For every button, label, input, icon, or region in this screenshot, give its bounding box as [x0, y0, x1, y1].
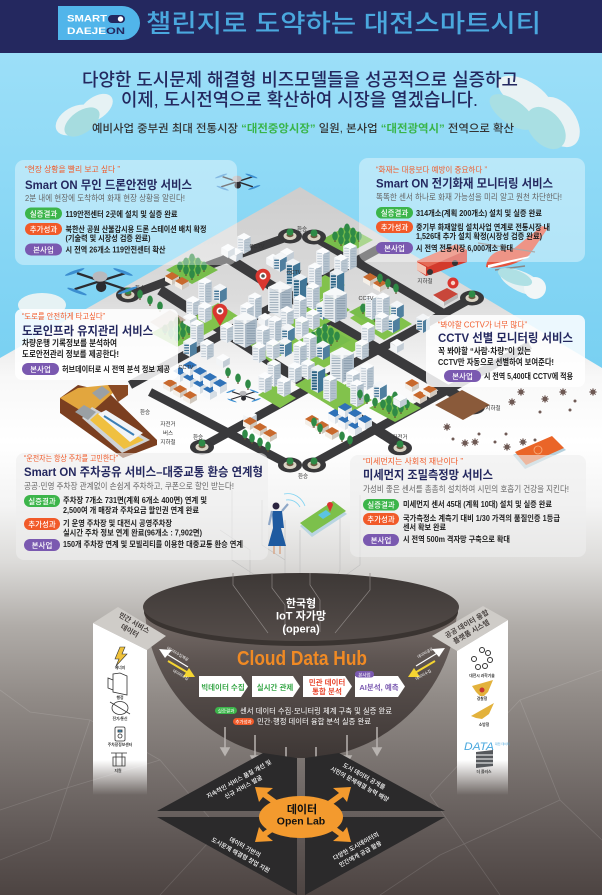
quadrant: bottom-left: 도시문제 해결형 창업 지원 — [210, 836, 271, 875]
icon: parking: 지원 — [114, 768, 122, 773]
city map illustration — [116, 224, 530, 480]
badge: main project: 본사업 — [33, 244, 54, 254]
subway cross-section illustration — [60, 385, 157, 458]
map labels: 환승 — [140, 408, 150, 416]
extra text: 센서 확보 완료 — [403, 522, 447, 532]
icon: stripes platform: 더 플러스 — [476, 769, 492, 774]
tower title: 민간 서비스 — [117, 610, 152, 636]
quote: “미세먼지는 사회적 재난이다 ” — [363, 456, 463, 466]
quote: “운전자는 항상 주차를 고민한다” — [24, 453, 118, 463]
badge: result: 실증결과 — [28, 496, 56, 506]
circuit lines above bowl — [220, 490, 360, 600]
badge: extra: 추가성과 — [30, 224, 57, 234]
headline: 이제, 도시전역으로 확산하여 시장을 열겠습니다. — [121, 90, 478, 110]
headline: 다양한 도시문제 해결형 비즈모델들을 성공적으로 실증하고 — [82, 70, 518, 90]
badge: main project — [25, 244, 62, 256]
process chevrons: 빅데이터 수집 — [201, 682, 245, 692]
city roads — [128, 236, 530, 465]
background network lines — [0, 670, 602, 895]
process chevrons: 통합 분석 — [312, 686, 342, 696]
map labels: CCTV — [179, 365, 194, 371]
background: isometric ground fading to dark — [0, 187, 602, 895]
main project text: 허브데이터로 시 전역 분석 정보 제공 — [62, 364, 170, 374]
map labels: 자전거 — [392, 433, 408, 441]
icon: energy — [115, 647, 127, 670]
drone over city — [226, 389, 261, 403]
extra text: 국가측정소 계측기 대비 1/30 가격의 품질인증 1등급 — [403, 513, 561, 523]
main project text: 시 전역 5,400대 CCTV에 적용 — [484, 371, 574, 381]
panel title: Smart ON 전기화재 모니터링 서비스 — [376, 176, 553, 190]
result text: 119안전센터 2곳에 설치 및 실증 완료 — [66, 209, 178, 219]
circuit lines on bowl — [233, 573, 370, 633]
map labels: 환승 — [297, 225, 307, 233]
cloud: left — [50, 88, 118, 142]
icon: data logo: 대전 데이터 — [495, 741, 510, 746]
badge: result — [376, 207, 413, 218]
panel title: 도로인프라 유지관리 서비스 — [22, 324, 153, 338]
helicopter — [478, 226, 548, 270]
description: CCTV만 자동으로 선별하여 보여준다! — [438, 357, 554, 367]
quote: “도로를 안전하게 타고싶다” — [22, 311, 105, 321]
extra text: 실시간 주차 정보 연계 완료(96개소 : 7,902면) — [63, 528, 202, 538]
map labels: 지하철 — [160, 438, 176, 446]
panel title: CCTV 선별 모니터링 서비스 — [438, 331, 573, 345]
icon: fire badge — [471, 703, 494, 727]
logo: Smart Daejeon: SMART — [67, 14, 107, 24]
quadrant: top-left — [157, 753, 297, 811]
badge: extra — [376, 221, 413, 233]
icon: building — [108, 673, 127, 700]
map labels: CCTV — [287, 270, 302, 276]
badge: result — [24, 495, 60, 507]
badge: main project — [376, 242, 413, 254]
badge: main project: 본사업 — [32, 540, 52, 550]
Cloud Data Hub title: Cloud Data Hub — [237, 648, 367, 670]
map labels: 지하철 — [485, 404, 501, 412]
extra text — [416, 222, 550, 241]
main project text: 시 전역 26개소 119안전센터 확산 — [66, 244, 166, 254]
green blocks and forests — [151, 224, 421, 422]
quote: “화재는 대응보다 예방이 중요하다 ” — [376, 164, 487, 174]
logo: Smart Daejeon: ON — [106, 26, 125, 37]
result text: 주차장 7개소 731면(계획 6개소 400면) 연계 및 — [63, 495, 207, 505]
roadside trees — [137, 274, 399, 452]
description: 차량운행 기록정보를 분석하여 — [22, 338, 117, 348]
orange arrows — [255, 787, 351, 842]
process chevrons: 민관 데이터 — [309, 677, 345, 687]
main project text: 시 전역 500m 격자망 구축으로 확대 — [403, 534, 510, 544]
icon: energy: 에너지 — [115, 665, 126, 670]
result text — [63, 495, 207, 515]
tower: public data system — [432, 606, 510, 795]
badge: extra: 추가성과 — [367, 514, 395, 524]
map labels: 환승 — [298, 472, 308, 480]
map labels: 자전거 — [160, 420, 176, 428]
badge: result: 실증결과 — [381, 208, 408, 218]
subtitle: 공공·민영 주차장 관계없이 손쉽게 주차하고, 쿠폰으로 할인 받는다! — [24, 481, 234, 491]
header bar — [0, 0, 602, 53]
center ellipse: data open lab: 데이터 — [287, 802, 317, 816]
quadrant: top-right: 도시 데이터 공개를 — [341, 761, 387, 791]
cloud data hub bowl — [143, 573, 459, 758]
description — [438, 346, 554, 367]
map labels: CCTV — [250, 244, 265, 250]
tower title: 플랫폼 시스템 — [451, 618, 491, 646]
IoT network label: IoT 자가망 — [276, 608, 326, 622]
panel title: 미세먼지 조밀측정망 서비스 — [363, 468, 493, 482]
icon: fire badge: 소방청 — [479, 722, 490, 727]
main title: 챌린지로 도약하는 대전스마트시티 — [146, 10, 541, 38]
panel: road infrastructure — [15, 309, 178, 380]
sub-headline: 예비사업 중부권 최대 전통시장 “대전중앙시장” 일원, 본사업 “대전광역시” 전역으로 확산 — [92, 121, 514, 135]
quadrant: bottom-left — [157, 817, 297, 895]
icon: parking — [111, 753, 127, 773]
icon: stripes platform — [476, 750, 493, 774]
extra text: 1,526대 추가 설치 확정(시장성 검증 완료) — [416, 231, 542, 241]
quote: “현장 상황을 빨리 보고 싶다 ” — [25, 164, 120, 174]
badge: extra: 추가성과 — [381, 222, 408, 232]
drone: large — [64, 267, 138, 296]
quadrant: top-left: 신규 서비스 발굴 — [223, 773, 264, 801]
bowl body — [145, 612, 457, 758]
badge: main project — [24, 539, 60, 551]
result line: 실증결과 — [218, 707, 234, 714]
center ellipse: data open lab — [259, 796, 343, 838]
headline — [82, 70, 518, 110]
result text: 314개소(계획 200개소) 설치 및 실증 완료 — [416, 208, 543, 218]
roundabouts — [116, 228, 485, 472]
main project text: 150개 주차장 연계 및 모빌리티를 이용한 대중교통 환승 연계 — [63, 539, 243, 549]
IoT network label: 한국형 — [286, 596, 316, 610]
extra text: 중기부 화재알림 설치사업 연계로 전통시장 내 — [416, 222, 550, 232]
subtitle: 2분 내에 현장에 도착하여 화재 현장 상황을 알린다! — [25, 193, 185, 203]
description: 꼭 봐야할 “사람·차량”이 있는 — [438, 346, 531, 356]
panel: fine dust monitoring — [350, 455, 586, 557]
description — [22, 338, 119, 359]
quadrant: bottom-right: 민간에게 공급 활용 — [338, 839, 384, 869]
subtitle: 똑똑한 센서 하나로 화재 가능성을 미리 알고 원천 차단한다! — [376, 192, 562, 202]
open lab diamond — [157, 753, 445, 895]
extra line: 추가성과 — [235, 718, 252, 725]
extra text — [63, 518, 202, 538]
city buildings — [183, 233, 430, 425]
IoT network label: (opera) — [282, 624, 320, 636]
icon: building: 행정 — [116, 695, 124, 700]
left data arrows — [159, 645, 195, 681]
icon: data logo: DATA — [464, 741, 494, 753]
cloud: below helicopter — [496, 263, 548, 301]
icon: data logo — [464, 741, 510, 753]
badge: extra — [363, 513, 399, 525]
badge: result: 실증결과 — [30, 208, 57, 218]
center ellipse: data open lab: Open Lab — [277, 816, 325, 828]
process chevrons: 본사업 — [358, 671, 371, 678]
bowl top surface — [143, 573, 459, 641]
icon: device: 주차장정보센터 — [108, 742, 133, 747]
smartphone air-quality screen — [513, 436, 566, 469]
badge: main project: 본사업 — [452, 371, 473, 381]
left data arrows: 데이터수집제공 — [166, 645, 190, 662]
right data arrows — [408, 646, 445, 681]
result line: 센서 데이터 수집·모니터링 체계 구축 및 실증 완료 — [240, 706, 392, 716]
smartphone map — [300, 501, 347, 537]
tower title: 공공 데이터 융합 — [443, 607, 491, 640]
drone: upper small — [215, 173, 261, 191]
left data arrows: 데이터수집 — [172, 668, 190, 681]
process chevrons: 실시간 관제 — [257, 682, 293, 692]
description: 도로안전관리 정보를 제공한다! — [22, 349, 119, 359]
badge: extra: 추가성과 — [28, 519, 56, 529]
icon: electric circle: 전기/통신 — [112, 716, 128, 721]
extra text: 기 운영 주차장 및 대전시 공영주차장 — [63, 518, 173, 528]
extra text: 북한산 공원 산불감시용 드론 스테이션 배치 확정 — [66, 224, 206, 234]
badge: extra — [25, 223, 62, 235]
quadrant: bottom-left: 데이터 기반의 — [228, 835, 262, 859]
quadrant: top-left: 지속적인 서비스 품질 개선 및 — [205, 758, 273, 800]
map pin: lower — [212, 304, 228, 326]
panel: CCTV monitoring — [426, 315, 585, 387]
map labels: 환승 — [193, 433, 203, 441]
badge: main project — [363, 534, 399, 546]
extra line: 민간·행정 데이터 융합 분석 실증 완료 — [257, 716, 371, 726]
bowl rim — [144, 578, 458, 646]
result text: 2,500여 개 매장과 주차요금 할인권 연계 완료 — [63, 505, 200, 515]
quadrant: bottom-right: 다양한 도시데이터의 — [332, 830, 380, 862]
quadrant: top-right — [305, 753, 445, 811]
badge: main project: 본사업 — [30, 364, 51, 374]
result text: 미세먼지 센서 45대 (계획 10대) 설치 및 실증 완료 — [403, 499, 553, 509]
IoT network label — [276, 596, 326, 636]
quadrant: top-right: 시민의 문제해결 능력 배양 — [329, 765, 391, 804]
tower title: 데이터 — [119, 622, 140, 639]
right data arrows: 데이터수집 — [414, 668, 432, 681]
icon: ring network: 대전시 과학기술 — [469, 673, 495, 678]
map pin: upper — [255, 269, 270, 291]
map labels — [135, 225, 501, 480]
icon: police badge: 경찰청 — [477, 696, 488, 701]
extra text: (기술력 및 시장성 검증 완료) — [66, 233, 151, 243]
extra text — [66, 224, 206, 243]
tower: private service data — [93, 607, 166, 795]
blue-roofed and orange-roofed houses — [150, 272, 490, 442]
panel: drone safety service — [15, 160, 237, 265]
map labels: CCTV — [359, 296, 374, 302]
logo: Smart Daejeon — [58, 6, 140, 40]
logo: Smart Daejeon: DAEJE — [67, 26, 106, 37]
down arrows to open lab — [221, 727, 381, 772]
right data arrows: 데이터공유 — [416, 646, 435, 659]
fire truck — [417, 244, 467, 276]
badge: main project: 본사업 — [371, 535, 391, 545]
process chevrons — [199, 671, 405, 697]
icon: ring network — [469, 648, 495, 678]
badge: main project — [22, 363, 59, 375]
badge: main project: 본사업 — [384, 243, 405, 253]
badge: result: 실증결과 — [367, 500, 395, 510]
quadrant: bottom-right — [305, 817, 445, 895]
badge: result — [363, 499, 399, 510]
map labels: 지하철 — [417, 277, 433, 285]
badge: result — [25, 208, 62, 220]
subtitle: 가성비 좋은 센서를 촘촘히 설치하여 시민의 호흡기 건강을 지킨다! — [363, 484, 569, 494]
map labels: 환승 — [135, 284, 145, 292]
icon: device — [108, 727, 133, 747]
process chevrons: AI분석, 예측 — [359, 682, 399, 692]
main project text: 시 전역 전통시장 6,000개소 확대 — [416, 243, 513, 253]
panel: electric fire monitoring — [359, 158, 585, 262]
panel title: Smart ON 주차공유 서비스–대중교통 환승 연계형 — [24, 464, 263, 479]
icon: police badge — [472, 680, 493, 701]
cloud: behind road card — [18, 293, 66, 317]
panel: parking share — [16, 453, 268, 560]
fire siren and station — [433, 278, 458, 306]
cloud: right — [484, 68, 589, 157]
quote: “봐야할 CCTV가 너무 많다” — [438, 320, 527, 330]
badge: extra — [24, 518, 60, 530]
map labels: 버스 — [163, 429, 173, 437]
extra text — [403, 513, 561, 532]
badge: main project — [444, 370, 481, 382]
icon: electric circle — [110, 702, 130, 721]
virus particles — [443, 388, 597, 451]
panel title: Smart ON 무인 드론안전망 서비스 — [25, 178, 192, 192]
woman with smartphone — [268, 494, 305, 554]
